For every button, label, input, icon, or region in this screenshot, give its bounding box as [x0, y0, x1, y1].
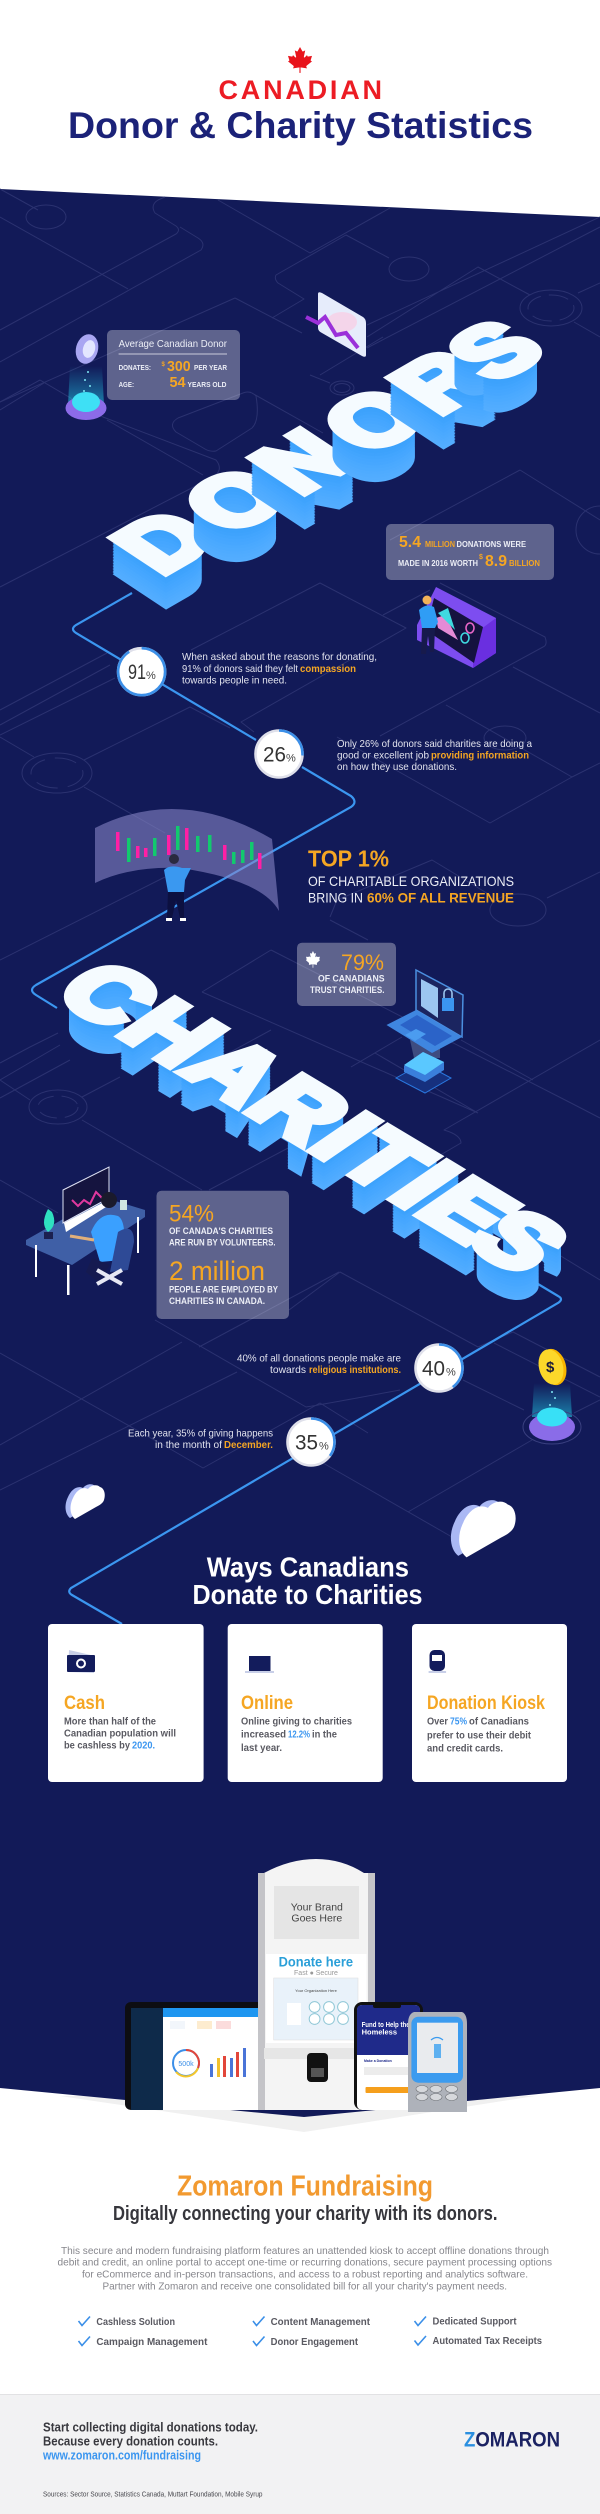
stat 91%: %: [146, 670, 156, 682]
panel: online: Online: [241, 1693, 293, 1714]
panel: volunteers and employment: OF CANADA'S CHARITIES: [169, 1226, 273, 1237]
text: top 1%: 60% OF ALL REVENUE: [367, 890, 514, 906]
text: top 1%: TOP 1%: [308, 846, 389, 872]
feature checklist: Donor Engagement: [271, 2336, 358, 2348]
stat 26%: %: [286, 752, 296, 764]
text: platform description: for eCommerce and in-person transactions, and access to a robust reporting and analytics software.: [82, 2269, 528, 2281]
text: top 1%: [308, 846, 514, 906]
icon: hologram person: [66, 332, 106, 420]
device: phone: Make a Donation: [364, 2059, 392, 2063]
heading: ways canadians donate: [192, 1552, 422, 1610]
panel: donation kiosk: prefer to use their debit: [427, 1729, 531, 1741]
panel: online: 12.2%: [288, 1729, 310, 1741]
icon: laptop: [245, 1656, 274, 1673]
feature checklist: [78, 2316, 542, 2348]
panel: average donor: PER YEAR: [194, 363, 227, 372]
panel: 5.4 million donations: DONATIONS WERE: [456, 540, 527, 549]
panel: volunteers and employment: CHARITIES IN CANADA.: [169, 1296, 265, 1307]
device: phone: [354, 2002, 423, 2110]
icon: laptop with lock on chip: [386, 970, 463, 1093]
panel: 5.4 million donations: [386, 524, 554, 580]
text: platform description: Partner with Zomaron and receive one consolidated bill for all your charity's payment needs.: [102, 2280, 507, 2292]
device: card terminal: [408, 2012, 467, 2112]
text: call to action: [42, 2420, 258, 2462]
text: religious institutions: 40% of all donations people make are: [237, 1353, 401, 1365]
device: donation kiosk: [258, 1859, 375, 2110]
panel: average donor: YEARS OLD: [188, 380, 227, 389]
icon: person at desk: [26, 1167, 145, 1295]
panel: cash: More than half of the: [64, 1715, 156, 1727]
panel: donation kiosk: [412, 1624, 567, 1782]
light grey chevron under navy panel: [60, 2096, 535, 2132]
text: providing information: [337, 738, 532, 773]
icon: large cloud: [451, 1500, 516, 1557]
panel: average donor: AGE:: [119, 380, 134, 389]
text: platform description: [58, 2245, 552, 2292]
heading: ways canadians donate: Ways Canadians: [207, 1552, 409, 1583]
device: donation kiosk: Your Organization Here: [295, 1988, 338, 1993]
stat 26%: [256, 730, 302, 778]
text: top 1%: BRING IN: [308, 890, 363, 906]
panel: average donor: [107, 330, 240, 400]
icon: kiosk: [429, 1650, 446, 1673]
panel: volunteers and employment: PEOPLE ARE EMPLOYED BY: [169, 1285, 279, 1296]
connector line: donors section: [32, 593, 354, 1008]
panel: 5.4 million donations: 8.9: [485, 553, 507, 570]
panel: average donor: $: [162, 362, 166, 368]
text: providing information: providing information: [431, 750, 529, 762]
logo: zomaron: ZOMARON: [464, 2429, 560, 2452]
CHARITIES isometric heading: CHARITIES: [34, 946, 594, 1290]
icon: coin hologram: [523, 1346, 581, 1444]
panel: donation kiosk: 75%: [450, 1715, 468, 1727]
panel: online: Online giving to charities: [241, 1715, 352, 1727]
panel: 79% trust: TRUST CHARITIES.: [310, 985, 384, 996]
icon: holographic chart with person: [95, 809, 279, 921]
title: Donor & Charity Statistics: [68, 105, 533, 146]
panel: cash: [48, 1624, 204, 1782]
icon: coin hologram: $: [546, 1359, 555, 1376]
text: december: Each year, 35% of giving happens: [128, 1428, 273, 1440]
footer band: [0, 2394, 600, 2514]
panel: donation kiosk: and credit cards.: [427, 1743, 503, 1755]
panel: cash: be cashless by: [64, 1739, 130, 1751]
panel: 5.4 million donations: MADE IN 2016 WORTH: [398, 559, 478, 568]
text: religious institutions: towards: [270, 1364, 306, 1376]
panel: average donor: 300: [167, 358, 191, 375]
stat 35%: [288, 1418, 334, 1466]
icon: cash: [67, 1650, 95, 1673]
heading: zomaron fundraising: Zomaron Fundraising: [177, 2171, 433, 2203]
icon: maple leaf: [288, 47, 312, 73]
feature checklist: Automated Tax Receipts: [432, 2335, 542, 2347]
panel: donation kiosk: Over: [427, 1715, 448, 1727]
stat 91%: [118, 648, 165, 695]
panel: 79% trust: 79%: [341, 950, 384, 975]
text: december: December.: [224, 1439, 273, 1451]
feature checklist: Content Management: [271, 2316, 370, 2328]
feature checklist: Campaign Management: [96, 2336, 208, 2348]
panel: volunteers and employment: 54%: [169, 1201, 214, 1228]
DONORS isometric heading: DONORS: [91, 306, 566, 587]
connector line: charities section: [69, 1278, 561, 1624]
panel: average donor: DONATES:: [119, 363, 151, 372]
panel: online: in the: [312, 1729, 337, 1741]
device: laptop dashboard: [125, 2002, 265, 2110]
text: compassion: 91% of donors said they felt: [182, 663, 298, 675]
panel: 5.4 million donations: $: [479, 554, 483, 561]
panel: average donor: Average Canadian Donor: [119, 338, 227, 350]
panel: online: last year.: [241, 1742, 282, 1754]
panel: 79% trust: OF CANADIANS: [318, 974, 384, 985]
panel: donation kiosk: of Canadians: [469, 1715, 529, 1727]
panel: volunteers and employment: [156, 1191, 289, 1319]
stat 40%: 40: [422, 1358, 445, 1380]
panel: cash: Canadian population will: [64, 1728, 176, 1740]
panel: average donor: 54: [170, 374, 186, 391]
stat 26%: 26: [263, 744, 286, 766]
device: donation kiosk: Fast ● Secure: [294, 1970, 338, 1977]
text: call to action: Start collecting digital donations today.: [43, 2420, 258, 2435]
device: donation kiosk: Donate here: [279, 1954, 353, 1970]
text: compassion: compassion: [300, 663, 356, 675]
feature checklist: Dedicated Support: [432, 2316, 517, 2328]
text: providing information: Only 26% of donors said charities are doing a: [337, 738, 532, 750]
heading: ways canadians donate: Donate to Charities: [192, 1579, 422, 1610]
icon: small cloud: [66, 1484, 105, 1519]
title: [68, 75, 533, 146]
device: laptop dashboard: 500k: [178, 2061, 194, 2068]
panel: cash: Cash: [64, 1693, 105, 1714]
device: phone: Homeless: [362, 2028, 397, 2036]
text: compassion: When asked about the reasons for donating,: [182, 651, 377, 663]
text: platform description: This secure and modern fundraising platform features an unattended kiosk to accept offline donations through: [61, 2245, 549, 2257]
navy panel: [0, 189, 600, 2117]
text: call to action: www.zomaron.com/fundraising: [42, 2447, 201, 2462]
stat 35%: %: [319, 1440, 329, 1452]
stat 35%: 35: [295, 1432, 318, 1454]
panel: online: increased: [241, 1729, 286, 1741]
title: CANADIAN: [218, 75, 382, 105]
text: sources: Sources: Sector Source, Statistics Canada, Muttart Foundation, Mobile Syrup: [43, 2492, 263, 2499]
stat 40%: %: [446, 1366, 456, 1378]
text: religious institutions: [237, 1353, 401, 1376]
panel: donation kiosk: Donation Kiosk: [427, 1693, 545, 1714]
text: top 1%: OF CHARITABLE ORGANIZATIONS: [308, 873, 514, 889]
icon: declining chart card: [306, 292, 366, 357]
text: compassion: [182, 651, 377, 686]
text: platform description: debit and credit, an online portal to accept one-time or recurring donations, secure payment processing options: [58, 2257, 552, 2269]
device: donation kiosk: Your Brand: [291, 1902, 343, 1914]
text: december: [128, 1428, 273, 1451]
panel: 5.4 million donations: MILLION: [425, 540, 455, 549]
text: december: in the month of: [155, 1439, 222, 1451]
feature checklist: Cashless Solution: [96, 2316, 175, 2328]
panel: 5.4 million donations: BILLION: [509, 559, 540, 568]
text: compassion: towards people in need.: [182, 674, 287, 686]
device: phone: Fund to Help the: [362, 2020, 410, 2029]
heading: zomaron fundraising: [113, 2171, 498, 2225]
text: call to action: Because every donation counts.: [43, 2434, 218, 2449]
panel: volunteers and employment: ARE RUN BY VOLUNTEERS.: [169, 1238, 276, 1249]
text: providing information: good or excellent job: [337, 750, 429, 762]
text: religious institutions: religious institutions.: [309, 1364, 401, 1376]
panel: cash: 2020.: [132, 1739, 155, 1751]
heading: zomaron fundraising: Digitally connecting your charity with its donors.: [113, 2203, 498, 2225]
stat 91%: 91: [128, 661, 146, 684]
panel: 79% trust: [297, 943, 396, 1006]
panel: volunteers and employment: 2 million: [169, 1256, 265, 1286]
device: donation kiosk: Goes Here: [291, 1912, 342, 1924]
stat 40%: [416, 1344, 462, 1392]
text: providing information: on how they use donations.: [337, 761, 457, 773]
panel: 5.4 million donations: 5.4: [399, 534, 421, 551]
panel: online: [228, 1624, 383, 1782]
icon: person at purple display: [417, 587, 496, 668]
